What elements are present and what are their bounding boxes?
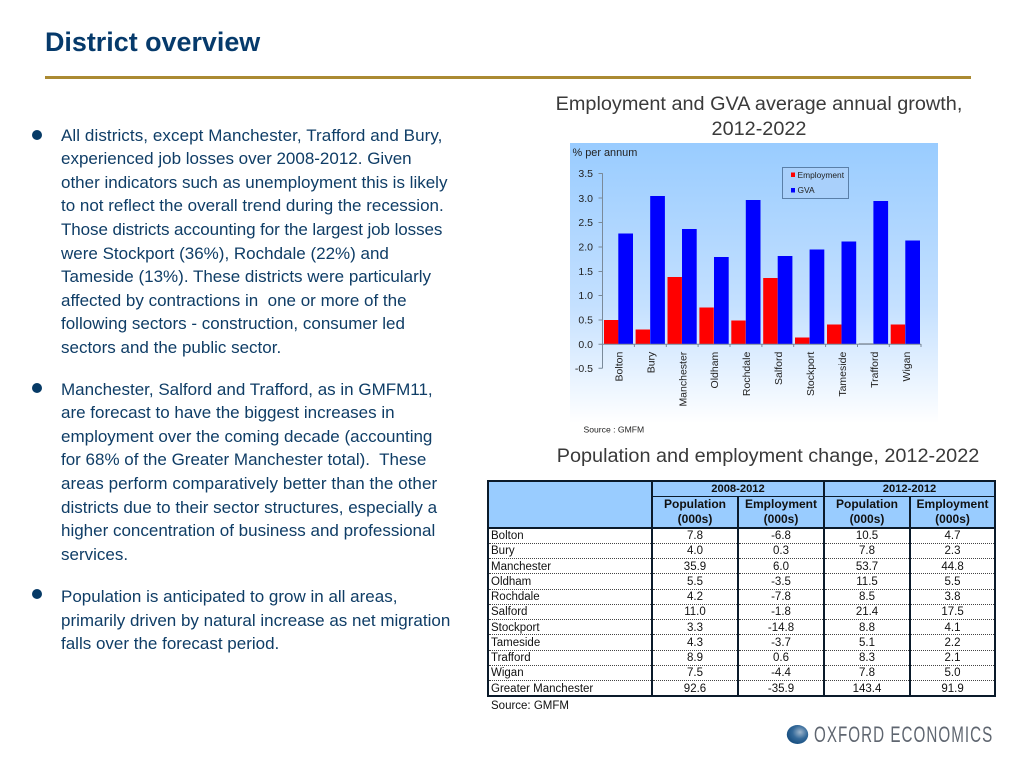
bullet 2 text: areas perform comparatively better than the other (61, 474, 437, 493)
bullet 3 marker (32, 589, 42, 599)
bullet 2 marker (32, 383, 42, 393)
data table: Trafford (491, 652, 531, 664)
category labels: Salford (773, 352, 785, 385)
y axis labels: 0.0 (578, 339, 593, 351)
data table: (000s) (764, 512, 798, 526)
employment bars (604, 277, 905, 344)
data table: 7.8 (859, 667, 875, 679)
category labels: Bolton (614, 352, 626, 381)
data table: 3.3 (687, 622, 703, 634)
data table: 3.8 (945, 591, 961, 603)
table source: Source: GMFM (491, 700, 569, 712)
chart heading: Employment and GVA average annual growth, (556, 93, 962, 115)
icon: globe (786, 725, 808, 744)
data table: 7.8 (859, 545, 875, 557)
legend (782, 168, 848, 198)
bullet 2 text: for 68% of the Greater Manchester total). These (61, 450, 426, 469)
bullet 1 text: other indicators such as unemployment this is likely (61, 173, 447, 192)
bullet 1 text: to not reflect the overall trend during the recession. (61, 196, 444, 215)
title: District overview (45, 27, 260, 57)
data table: Manchester (491, 561, 551, 573)
bullet 2 text (61, 380, 438, 564)
data table: 8.5 (859, 591, 875, 603)
data table: 5.1 (859, 637, 875, 649)
bullet 2 text: Manchester, Salford and Trafford, as in GMFM11, (61, 380, 433, 399)
bullet 1 text: following sectors - construction, consumer led (61, 314, 405, 333)
bullet 3 text: primarily driven by natural increase as net migration (61, 611, 450, 630)
legend: Employment (798, 170, 845, 180)
data table: 5.5 (687, 576, 703, 588)
data table: 44.8 (941, 561, 964, 573)
data table: 53.7 (856, 561, 878, 573)
data table: Population (664, 496, 726, 510)
data table: 17.5 (941, 606, 964, 618)
data table: 4.3 (687, 637, 703, 649)
y axis labels: 1.5 (578, 266, 593, 278)
axes (598, 173, 921, 368)
category labels: Rochdale (741, 352, 753, 396)
bullet 1 text: affected by contractions in one or more of the (61, 291, 407, 310)
y axis labels: 2.5 (578, 217, 593, 229)
data table (487, 480, 996, 697)
data table: 6.0 (773, 561, 789, 573)
y axis labels: 0.5 (578, 314, 593, 326)
data table: 0.6 (773, 652, 789, 664)
data table: Population (836, 496, 898, 510)
bullet 1 text (61, 126, 448, 357)
data table: -14.8 (768, 622, 794, 634)
data table: (000s) (850, 512, 884, 526)
data table: -35.9 (768, 683, 794, 695)
data table: -4.4 (771, 667, 791, 679)
data table: Oldham (491, 576, 531, 588)
data table: 8.8 (859, 622, 875, 634)
table heading: Population and employment change, 2012-2022 (557, 445, 979, 467)
bullet 1 text: sectors and the public sector. (61, 338, 281, 357)
data table: 2.2 (945, 637, 961, 649)
data table: 0.3 (773, 545, 789, 557)
data table: Tameside (491, 637, 540, 649)
logo: Oxford Economics (786, 722, 993, 747)
data table: (000s) (935, 512, 970, 526)
data table: -1.8 (771, 606, 791, 618)
logo wordmark: OXFORD ECONOMICS (814, 722, 993, 747)
data table: Wigan (491, 667, 524, 679)
category labels: Stockport (805, 352, 817, 396)
data table: Stockport (491, 622, 540, 634)
bullet 1 text: All districts, except Manchester, Trafford and Bury, (61, 126, 442, 145)
bullet 2 text: higher concentration of business and professional (61, 521, 435, 540)
y axis labels (575, 168, 593, 375)
bullet 1 marker (32, 130, 42, 140)
data table: -7.8 (771, 591, 791, 603)
data table: 4.2 (687, 591, 703, 603)
chart source: Source : GMFM (584, 424, 644, 434)
chart heading (556, 93, 962, 140)
data table: 10.5 (856, 530, 878, 542)
data table: 2.1 (945, 652, 961, 664)
bullet 3 text: Population is anticipated to grow in all areas, (61, 587, 397, 606)
data table: 8.3 (859, 652, 875, 664)
data table: Bury (491, 545, 515, 557)
data table: 91.9 (941, 683, 964, 695)
title rule (45, 76, 971, 79)
bullet 1 text: experienced job losses over 2008-2012. Given (61, 149, 412, 168)
GVA bars (618, 196, 920, 344)
data table: 4.1 (945, 622, 961, 634)
bullet 3 text (61, 587, 450, 653)
data table: -3.5 (771, 576, 791, 588)
y axis labels: 1.0 (578, 290, 593, 302)
y axis labels: 3.5 (578, 168, 593, 180)
data table: 21.4 (856, 606, 878, 618)
data table: 35.9 (684, 561, 706, 573)
category labels: Trafford (869, 352, 881, 388)
data table: (000s) (678, 512, 712, 526)
category labels: Manchester (678, 351, 690, 407)
data table: 143.4 (853, 683, 881, 695)
data table: Rochdale (491, 591, 540, 603)
data table: Bolton (491, 530, 524, 542)
data table: -3.7 (771, 637, 791, 649)
data table: 2008-2012 (711, 482, 765, 494)
data table: 5.5 (945, 576, 961, 588)
data table: 5.0 (945, 667, 961, 679)
data table: -6.8 (771, 530, 791, 542)
y axis labels: 2.0 (578, 242, 593, 254)
data table: Salford (491, 606, 527, 618)
data table: 7.5 (687, 667, 703, 679)
bullet 2 text: districts due to their sector structures, especially a (61, 498, 437, 517)
category labels (614, 351, 913, 407)
category labels: Oldham (709, 351, 721, 388)
data table: 4.0 (687, 545, 703, 557)
bullet 3 text: falls over the forecast period. (61, 634, 279, 653)
bullet 2 text: services. (61, 545, 128, 564)
chart heading: 2012-2022 (712, 118, 806, 140)
data table: 11.5 (856, 576, 878, 588)
data table: 11.0 (684, 606, 706, 618)
data table: 4.7 (945, 530, 961, 542)
bar chart: employment and GVA growth (570, 143, 938, 434)
data table: Employment (917, 496, 989, 510)
data table: 8.9 (687, 652, 703, 664)
data table: 2.3 (945, 545, 961, 557)
data table: 2012-2012 (883, 482, 936, 494)
category labels: Bury (646, 351, 658, 373)
bullet 1 text: were Stockport (36%), Rochdale (22%) and (61, 244, 389, 263)
data table: Employment (745, 496, 817, 510)
data table: 92.6 (684, 683, 706, 695)
legend: GVA (798, 185, 815, 195)
bullet 1 text: Tameside (13%). These districts were particularly (61, 267, 431, 286)
bullet 1 text: Those districts accounting for the largest job losses (61, 220, 442, 239)
data table: 7.8 (687, 530, 703, 542)
data table: Greater Manchester (491, 683, 593, 695)
bullet 2 text: are forecast to have the biggest increases in (61, 403, 395, 422)
category labels: Wigan (901, 352, 913, 381)
bullet 2 text: employment over the coming decade (accounting (61, 427, 432, 446)
y axis labels: -0.5 (575, 363, 593, 375)
y axis labels: 3.0 (578, 193, 593, 205)
category labels: Tameside (837, 352, 849, 397)
bar chart: employment and GVA growth: % per annum (572, 147, 637, 159)
